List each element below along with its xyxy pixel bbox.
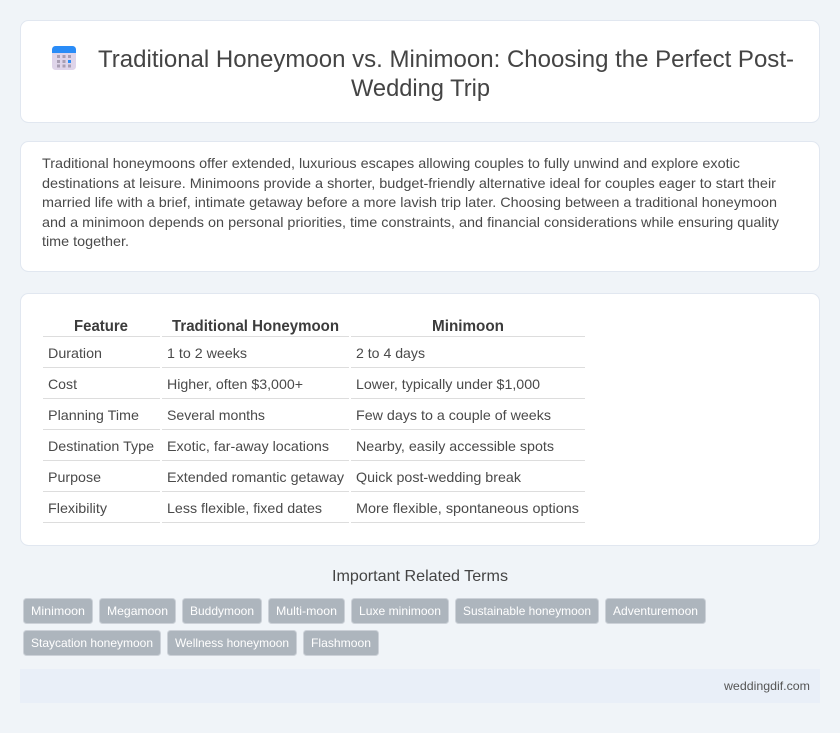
row: planning time: Planning Time — [48, 407, 139, 423]
related terms chips: Sustainable honeymoon — [463, 604, 591, 618]
row: planning time — [43, 407, 585, 430]
table header: Traditional Honeymoon — [172, 318, 339, 335]
panel: comparison table — [20, 294, 820, 546]
row: flexibility: More flexible, spontaneous options — [356, 500, 579, 516]
row: destination type: Nearby, easily accessible spots — [356, 438, 554, 454]
table header: Feature — [74, 318, 128, 335]
table header: Minimoon — [432, 318, 504, 335]
related terms chips: Flashmoon — [311, 636, 371, 650]
related terms chips: Megamoon — [107, 604, 168, 618]
row: destination type: Destination Type — [48, 438, 154, 454]
row: flexibility: Less flexible, fixed dates — [167, 500, 322, 516]
text block: summary: and a minimoon depends on personal priorities, time constraints, and financial considerations while ensuring quality — [42, 214, 779, 230]
related terms chips: Multi-moon — [276, 604, 337, 618]
row: purpose: Purpose — [48, 469, 101, 485]
related terms chips: Buddymoon — [190, 604, 254, 618]
row: cost: Higher, often $3,000+ — [167, 376, 303, 392]
row: duration — [43, 345, 585, 368]
row: planning time: Few days to a couple of weeks — [356, 407, 551, 423]
row: destination type — [43, 438, 585, 461]
row: purpose: Quick post-wedding break — [356, 469, 522, 485]
panel: summary paragraph — [20, 142, 820, 272]
row: destination type: Exotic, far-away locations — [167, 438, 329, 454]
related terms chips: Luxe minimoon — [359, 604, 441, 618]
row: planning time: Several months — [167, 407, 265, 423]
text block: summary: time together. — [42, 233, 129, 249]
row: purpose — [43, 469, 585, 492]
icon: calendar — [52, 46, 76, 70]
row: cost: Lower, typically under $1,000 — [356, 376, 540, 392]
row: duration: 2 to 4 days — [356, 345, 425, 361]
panel: title header — [20, 20, 820, 122]
text block: summary: destinations at leisure. Minimoons provide a shorter, budget-friendly alternative ideal for couples eager to start their — [42, 175, 776, 191]
table header — [43, 318, 585, 337]
row: purpose: Extended romantic getaway — [167, 469, 344, 485]
title: Traditional Honeymoon vs. Minimoon: Choosing the Perfect Post- — [98, 46, 794, 73]
related terms chips: Adventuremoon — [613, 604, 698, 618]
row: flexibility — [43, 500, 585, 523]
text block: summary — [42, 155, 779, 249]
footer: weddingdif.com — [723, 679, 810, 693]
text block: summary: married life with a brief, intimate getaway before a more lavish trip later. Choosing between a traditional honeymoon — [42, 194, 777, 210]
row: duration: Duration — [48, 345, 102, 361]
footer — [20, 669, 820, 703]
title — [98, 46, 794, 102]
row: flexibility: Flexibility — [48, 500, 107, 516]
related terms chips — [24, 598, 706, 656]
row: cost: Cost — [48, 376, 77, 392]
row: duration: 1 to 2 weeks — [167, 345, 247, 361]
row: cost — [43, 376, 585, 399]
heading: related terms: Important Related Terms — [332, 568, 508, 585]
related terms chips: Wellness honeymoon — [175, 636, 289, 650]
related terms chips: Minimoon — [31, 604, 85, 618]
related terms chips: Staycation honeymoon — [31, 636, 153, 650]
title: Wedding Trip — [351, 75, 490, 102]
text block: summary: Traditional honeymoons offer extended, luxurious escapes allowing couples to fully unwind and explore exotic — [42, 155, 740, 171]
